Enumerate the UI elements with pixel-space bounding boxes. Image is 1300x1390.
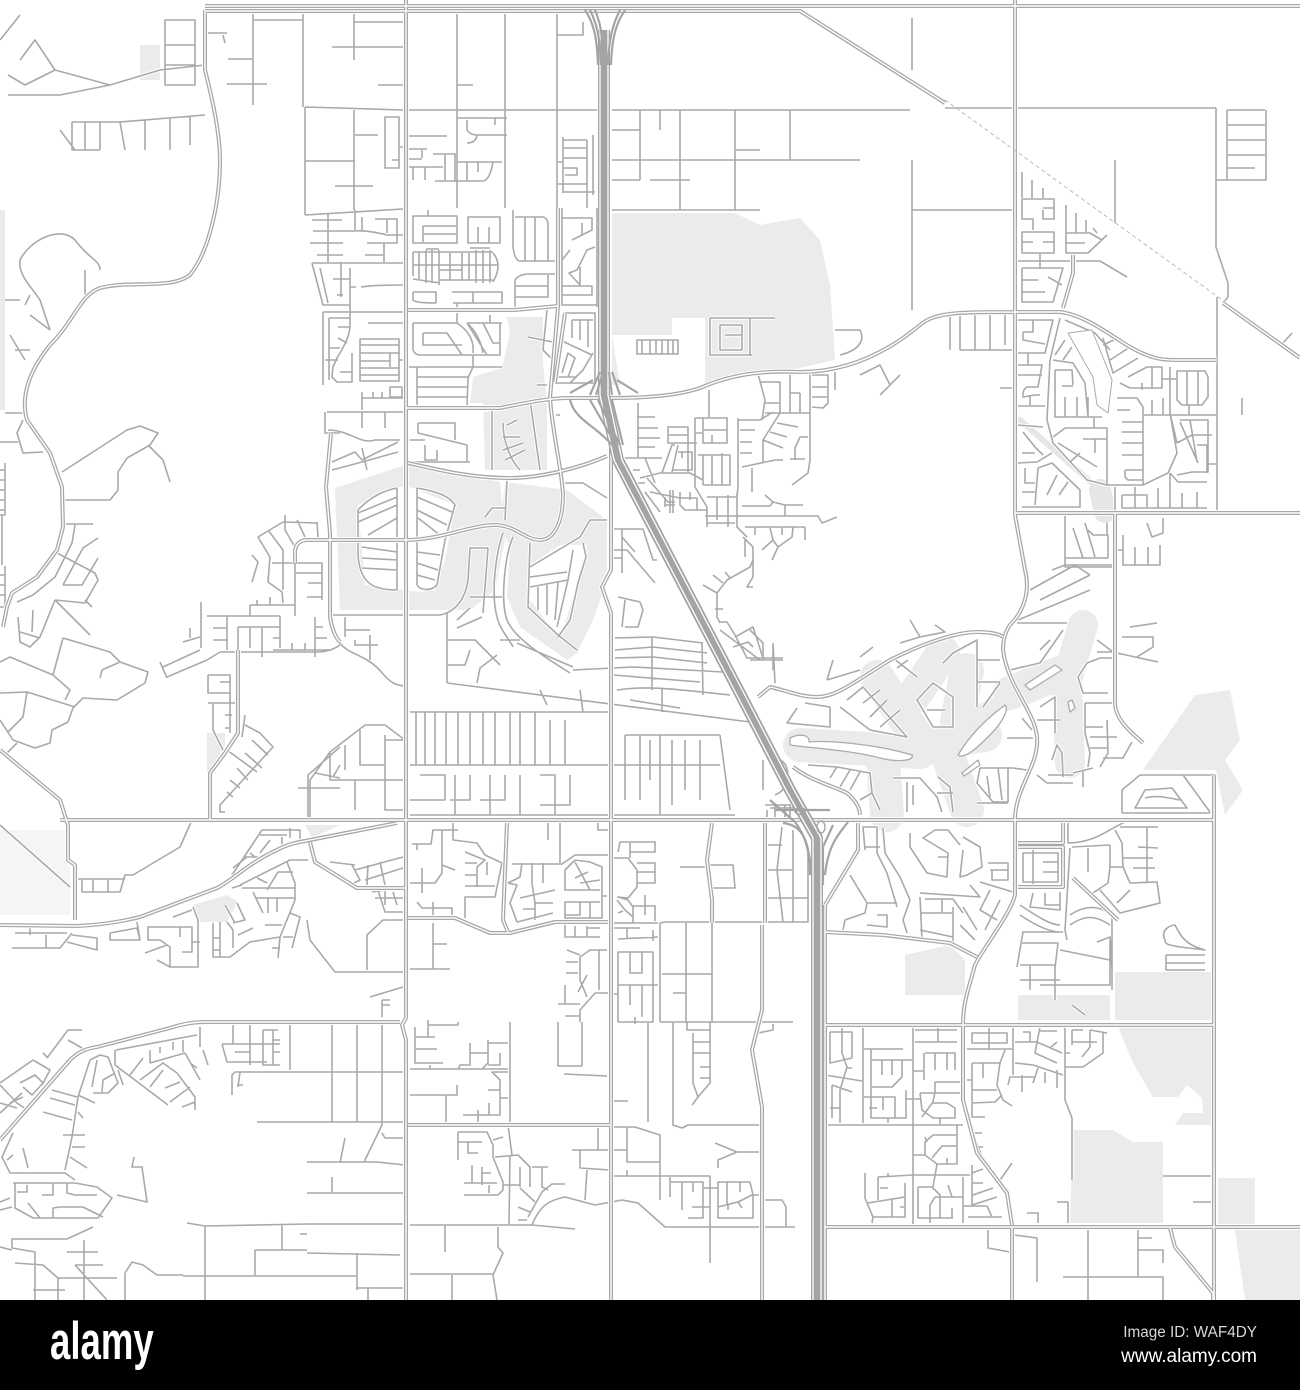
golf course water features — [790, 330, 1112, 776]
interchange loops — [795, 808, 825, 833]
freeway — [570, 10, 848, 1300]
railway line — [945, 100, 1225, 302]
image id: Image ID: WAF4DY — [1123, 1324, 1257, 1341]
footer bar — [0, 1300, 1300, 1390]
website url: www.alamy.com — [1120, 1346, 1257, 1367]
interchange ramps — [570, 10, 848, 885]
logo: alamy: alamy — [50, 1311, 154, 1371]
